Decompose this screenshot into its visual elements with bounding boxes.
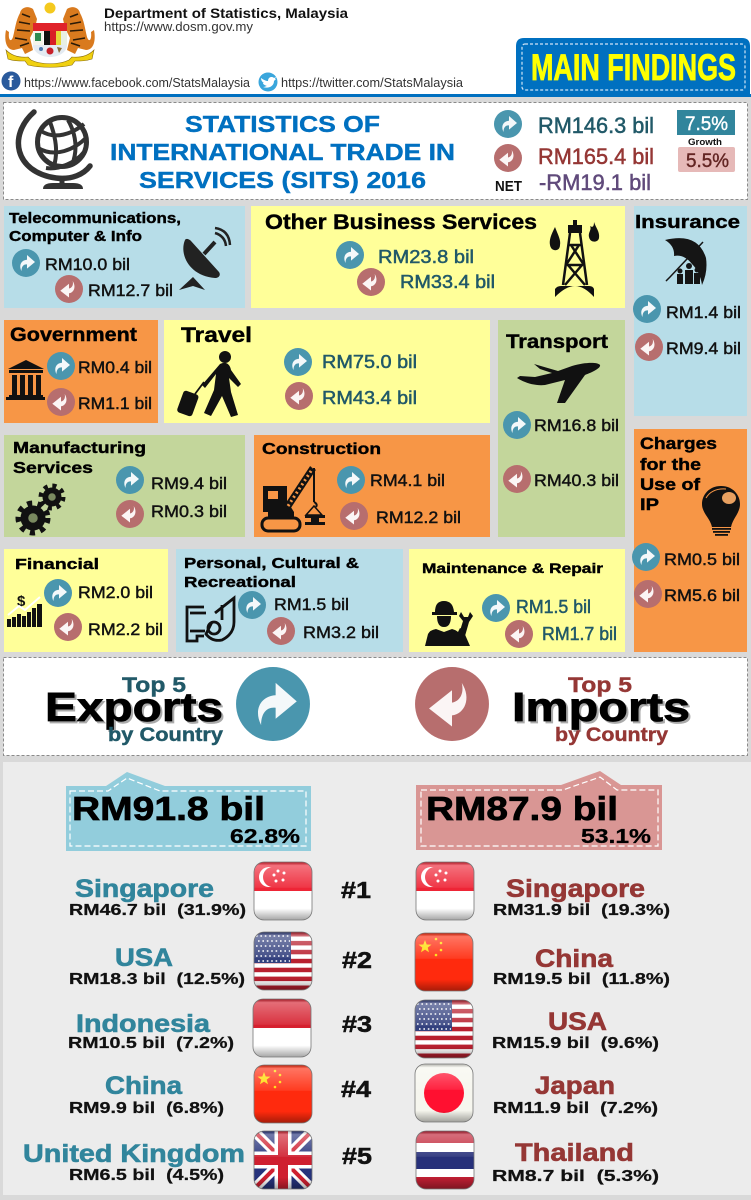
panel: insurance bbox=[633, 206, 747, 416]
icon: facebook bbox=[2, 72, 20, 91]
callout: top 5 imports total bbox=[416, 771, 662, 850]
export country 3: RM10.5 bil (7.2%) bbox=[68, 1035, 234, 1052]
import country 1 bbox=[493, 875, 670, 919]
net value: -RM19.1 bil bbox=[539, 170, 651, 195]
icon: worker with wrench bbox=[425, 601, 473, 646]
heading: Recreational bbox=[184, 574, 296, 591]
exports value: RM16.8 bil bbox=[534, 416, 619, 435]
icon: imports arrow bbox=[340, 502, 368, 530]
import country 2: China bbox=[535, 945, 614, 973]
import country 2: RM19.5 bil (11.8%) bbox=[493, 971, 670, 988]
icon: exports arrow bbox=[632, 543, 660, 571]
exports value: RM9.4 bil bbox=[151, 474, 227, 493]
icon: imports arrow bbox=[54, 613, 82, 641]
flag: Indonesia bbox=[253, 999, 311, 1057]
exports value: RM1.5 bil bbox=[274, 595, 349, 614]
icon: imports arrow bbox=[494, 144, 522, 172]
icon: imports arrow bbox=[267, 617, 295, 645]
icon: twitter bbox=[258, 72, 278, 92]
heading: Use of bbox=[640, 476, 701, 494]
panel: telecommunications bbox=[4, 206, 245, 308]
export country 2: USA bbox=[115, 944, 173, 972]
flag: United Kingdom bbox=[254, 1131, 312, 1189]
callout: top 5 imports total: 53.1% bbox=[581, 826, 651, 848]
icon: film and music bbox=[187, 598, 234, 641]
exports value: RM75.0 bil bbox=[322, 352, 417, 372]
icon: umbrella and family bbox=[665, 238, 706, 285]
icon: exports arrow bbox=[494, 110, 522, 138]
heading bbox=[184, 555, 359, 591]
callout: top 5 exports total: 62.8% bbox=[230, 826, 300, 848]
icon: gears bbox=[18, 486, 63, 532]
icon: government building bbox=[6, 360, 45, 400]
import country 5: RM8.7 bil (5.3%) bbox=[492, 1168, 659, 1185]
icon: crane bbox=[262, 468, 325, 531]
exports heading bbox=[45, 674, 225, 746]
heading: IP bbox=[640, 496, 659, 514]
export growth: 7.5% bbox=[685, 114, 728, 135]
facebook link: https://www.facebook.com/StatsMalaysia bbox=[24, 75, 251, 90]
flag: USA bbox=[415, 1000, 473, 1058]
title: STATISTICS OF bbox=[185, 111, 380, 137]
icon: imports arrow bbox=[285, 382, 313, 410]
icon: exports arrow bbox=[482, 594, 510, 622]
heading: Charges bbox=[640, 435, 717, 453]
heading: Maintenance & Repair bbox=[422, 560, 604, 576]
imports value: RM12.2 bil bbox=[376, 508, 461, 527]
imports value: RM1.1 bil bbox=[78, 394, 152, 413]
icon: exports arrow bbox=[238, 591, 266, 619]
flag: Japan bbox=[415, 1064, 473, 1122]
heading: Insurance bbox=[635, 212, 740, 232]
total imports: RM165.4 bil bbox=[538, 144, 654, 169]
heading: Manufacturing bbox=[13, 440, 146, 457]
ranking row 5 bbox=[23, 1131, 659, 1189]
import country 4: Japan bbox=[535, 1072, 615, 1100]
imports value: RM43.4 bil bbox=[322, 388, 417, 408]
exports value: RM0.4 bil bbox=[78, 358, 152, 377]
export country 3: Indonesia bbox=[76, 1010, 211, 1038]
flag: Thailand bbox=[416, 1131, 474, 1189]
icon: imports arrow bbox=[116, 500, 144, 528]
icon: exports arrow bbox=[116, 466, 144, 494]
imports value: RM9.4 bil bbox=[666, 339, 741, 358]
header: organisation identity bbox=[2, 2, 464, 92]
title bbox=[110, 111, 455, 193]
heading: Other Business Services bbox=[265, 211, 537, 234]
panel: overall summary bbox=[4, 102, 748, 200]
exports value: RM0.5 bil bbox=[664, 550, 740, 569]
heading: Telecommunications, bbox=[9, 211, 181, 227]
export country 3 bbox=[68, 1010, 234, 1052]
export country 4 bbox=[69, 1072, 224, 1117]
icon: large exports arrow bbox=[236, 667, 310, 741]
imports value: RM3.2 bil bbox=[303, 623, 379, 642]
import country 4 bbox=[493, 1072, 658, 1117]
flag: Singapore bbox=[416, 862, 474, 920]
import country 3: USA bbox=[548, 1008, 607, 1036]
ranking row 3 bbox=[68, 999, 659, 1058]
heading: Computer & Info bbox=[9, 229, 142, 245]
exports value: RM1.4 bil bbox=[666, 303, 741, 322]
export country 2 bbox=[69, 944, 245, 988]
icon: imports arrow bbox=[503, 465, 531, 493]
import country 4: RM11.9 bil (7.2%) bbox=[493, 1100, 658, 1117]
exports heading: Exports bbox=[47, 686, 225, 732]
icon: imports arrow bbox=[634, 580, 662, 608]
panel: personal, cultural and recreational bbox=[176, 549, 403, 652]
heading: Construction bbox=[262, 441, 381, 458]
icon: exports arrow bbox=[284, 348, 312, 376]
ranking row 1 bbox=[69, 862, 670, 920]
icon: light bulb bbox=[702, 486, 740, 536]
imports value: RM2.2 bil bbox=[88, 620, 163, 639]
icon: exports arrow bbox=[336, 241, 364, 269]
panel: maintenance and repair bbox=[409, 549, 625, 652]
import growth bbox=[678, 147, 735, 172]
flag: Singapore bbox=[254, 862, 312, 920]
icon: facebook: f bbox=[8, 74, 14, 91]
heading bbox=[9, 211, 181, 245]
exports value: RM2.0 bil bbox=[78, 583, 153, 602]
title: SERVICES (SITS) 2016 bbox=[139, 167, 426, 193]
heading: Financial bbox=[15, 556, 99, 573]
imports value: RM5.6 bil bbox=[664, 586, 740, 605]
exports heading: Exports bbox=[45, 684, 223, 730]
panel: charges for the use of IP bbox=[632, 429, 747, 652]
panel: top 5 countries background bbox=[3, 762, 751, 1195]
imports value: RM33.4 bil bbox=[400, 272, 495, 292]
import country 5 bbox=[492, 1139, 659, 1185]
callout: top 5 exports total bbox=[66, 772, 311, 851]
icon: exports arrow bbox=[503, 411, 531, 439]
export country 5 bbox=[23, 1140, 245, 1184]
export country 1 bbox=[69, 875, 246, 919]
callout: top 5 imports total: RM87.9 bil bbox=[426, 790, 618, 827]
heading: Transport bbox=[506, 332, 609, 353]
import country 5: Thailand bbox=[515, 1139, 634, 1167]
icon: exports arrow bbox=[47, 352, 75, 380]
imports heading bbox=[512, 674, 692, 746]
import country 1: RM31.9 bil (19.3%) bbox=[493, 902, 670, 919]
panel: transport bbox=[498, 320, 625, 537]
import country 1: Singapore bbox=[506, 875, 645, 903]
imports heading: Imports bbox=[512, 684, 690, 730]
exports value: RM10.0 bil bbox=[45, 255, 130, 274]
export country 4: RM9.9 bil (6.8%) bbox=[69, 1100, 224, 1117]
heading: Services bbox=[13, 460, 93, 477]
badge: main findings bbox=[516, 38, 750, 95]
imports value: RM1.7 bil bbox=[542, 624, 617, 644]
icon: exports arrow bbox=[12, 249, 40, 277]
export country 2: RM18.3 bil (12.5%) bbox=[69, 971, 245, 988]
export country 1: RM46.7 bil (31.9%) bbox=[69, 902, 246, 919]
imports value: RM0.3 bil bbox=[151, 502, 227, 521]
rank 3: #3 bbox=[342, 1011, 372, 1037]
rank 1: #1 bbox=[341, 877, 371, 903]
import country 2 bbox=[493, 945, 670, 988]
growth label: Growth bbox=[688, 137, 722, 147]
icon: airplane bbox=[517, 363, 600, 403]
icon: satellite dish bbox=[179, 228, 230, 290]
exports value: RM4.1 bil bbox=[370, 471, 445, 490]
rank 4: #4 bbox=[341, 1076, 371, 1102]
icon: dollar bar chart bbox=[7, 593, 42, 627]
icon: oil rig bbox=[550, 220, 599, 297]
exports value: RM1.5 bil bbox=[516, 597, 591, 617]
icon: large imports arrow bbox=[415, 667, 489, 741]
heading: Personal, Cultural & bbox=[184, 555, 359, 572]
panel: financial bbox=[4, 549, 168, 652]
icon: exports arrow bbox=[44, 579, 72, 607]
icon: Malaysian coat of arms bbox=[5, 2, 95, 67]
icon: exports arrow bbox=[337, 466, 365, 494]
export growth bbox=[677, 110, 735, 135]
export country 5: RM6.5 bil (4.5%) bbox=[69, 1167, 224, 1184]
exports heading: Top 5 bbox=[122, 674, 186, 697]
heading: Government bbox=[10, 325, 138, 346]
panel: top 5 banner bbox=[4, 658, 748, 756]
callout: top 5 exports total: RM91.8 bil bbox=[72, 790, 265, 827]
imports heading: by Country bbox=[555, 725, 668, 746]
total exports: RM146.3 bil bbox=[538, 113, 654, 138]
imports value: RM12.7 bil bbox=[88, 281, 173, 300]
icon: traveller with suitcase bbox=[176, 351, 241, 417]
heading: for the bbox=[640, 456, 701, 474]
panel: travel bbox=[164, 320, 490, 423]
import country 3 bbox=[492, 1008, 659, 1052]
icon: imports arrow bbox=[47, 388, 75, 416]
import growth: 5.5% bbox=[686, 151, 729, 172]
export country 1: Singapore bbox=[75, 875, 214, 903]
icon: imports arrow bbox=[635, 333, 663, 361]
heading bbox=[13, 440, 146, 477]
icon: dollar bar chart: $ bbox=[17, 593, 26, 610]
export country 5: United Kingdom bbox=[23, 1140, 245, 1168]
icon: imports arrow bbox=[505, 620, 533, 648]
exports heading: by Country bbox=[108, 725, 223, 746]
panel: manufacturing services bbox=[4, 435, 245, 537]
heading bbox=[640, 435, 717, 514]
import country 3: RM15.9 bil (9.6%) bbox=[492, 1035, 659, 1052]
exports value: RM23.8 bil bbox=[378, 247, 474, 267]
website: https://www.dosm.gov.my bbox=[104, 20, 254, 34]
net label: NET bbox=[495, 178, 522, 195]
organisation name: Department of Statistics, Malaysia bbox=[104, 5, 348, 21]
heading: Travel bbox=[181, 324, 252, 347]
twitter link: https://twitter.com/StatsMalaysia bbox=[281, 75, 464, 90]
icon: exports arrow bbox=[633, 295, 661, 323]
icon: globe bbox=[18, 112, 90, 189]
panel: government bbox=[4, 320, 158, 423]
ranking row 4 bbox=[69, 1064, 658, 1123]
imports value: RM40.3 bil bbox=[534, 471, 619, 490]
panel: construction bbox=[254, 435, 490, 537]
imports heading: Imports bbox=[514, 686, 692, 732]
export country 4: China bbox=[105, 1072, 183, 1100]
flag: China bbox=[415, 933, 473, 991]
ranking row 2 bbox=[69, 932, 670, 991]
flag: USA bbox=[254, 932, 312, 990]
imports heading: Top 5 bbox=[568, 674, 632, 697]
icon: imports arrow bbox=[357, 268, 385, 296]
flag: China bbox=[254, 1065, 312, 1123]
rank 2: #2 bbox=[342, 947, 372, 973]
title: INTERNATIONAL TRADE IN bbox=[110, 139, 455, 165]
icon: imports arrow bbox=[55, 275, 83, 303]
rank 5: #5 bbox=[342, 1143, 372, 1169]
panel: other business services bbox=[251, 206, 625, 308]
